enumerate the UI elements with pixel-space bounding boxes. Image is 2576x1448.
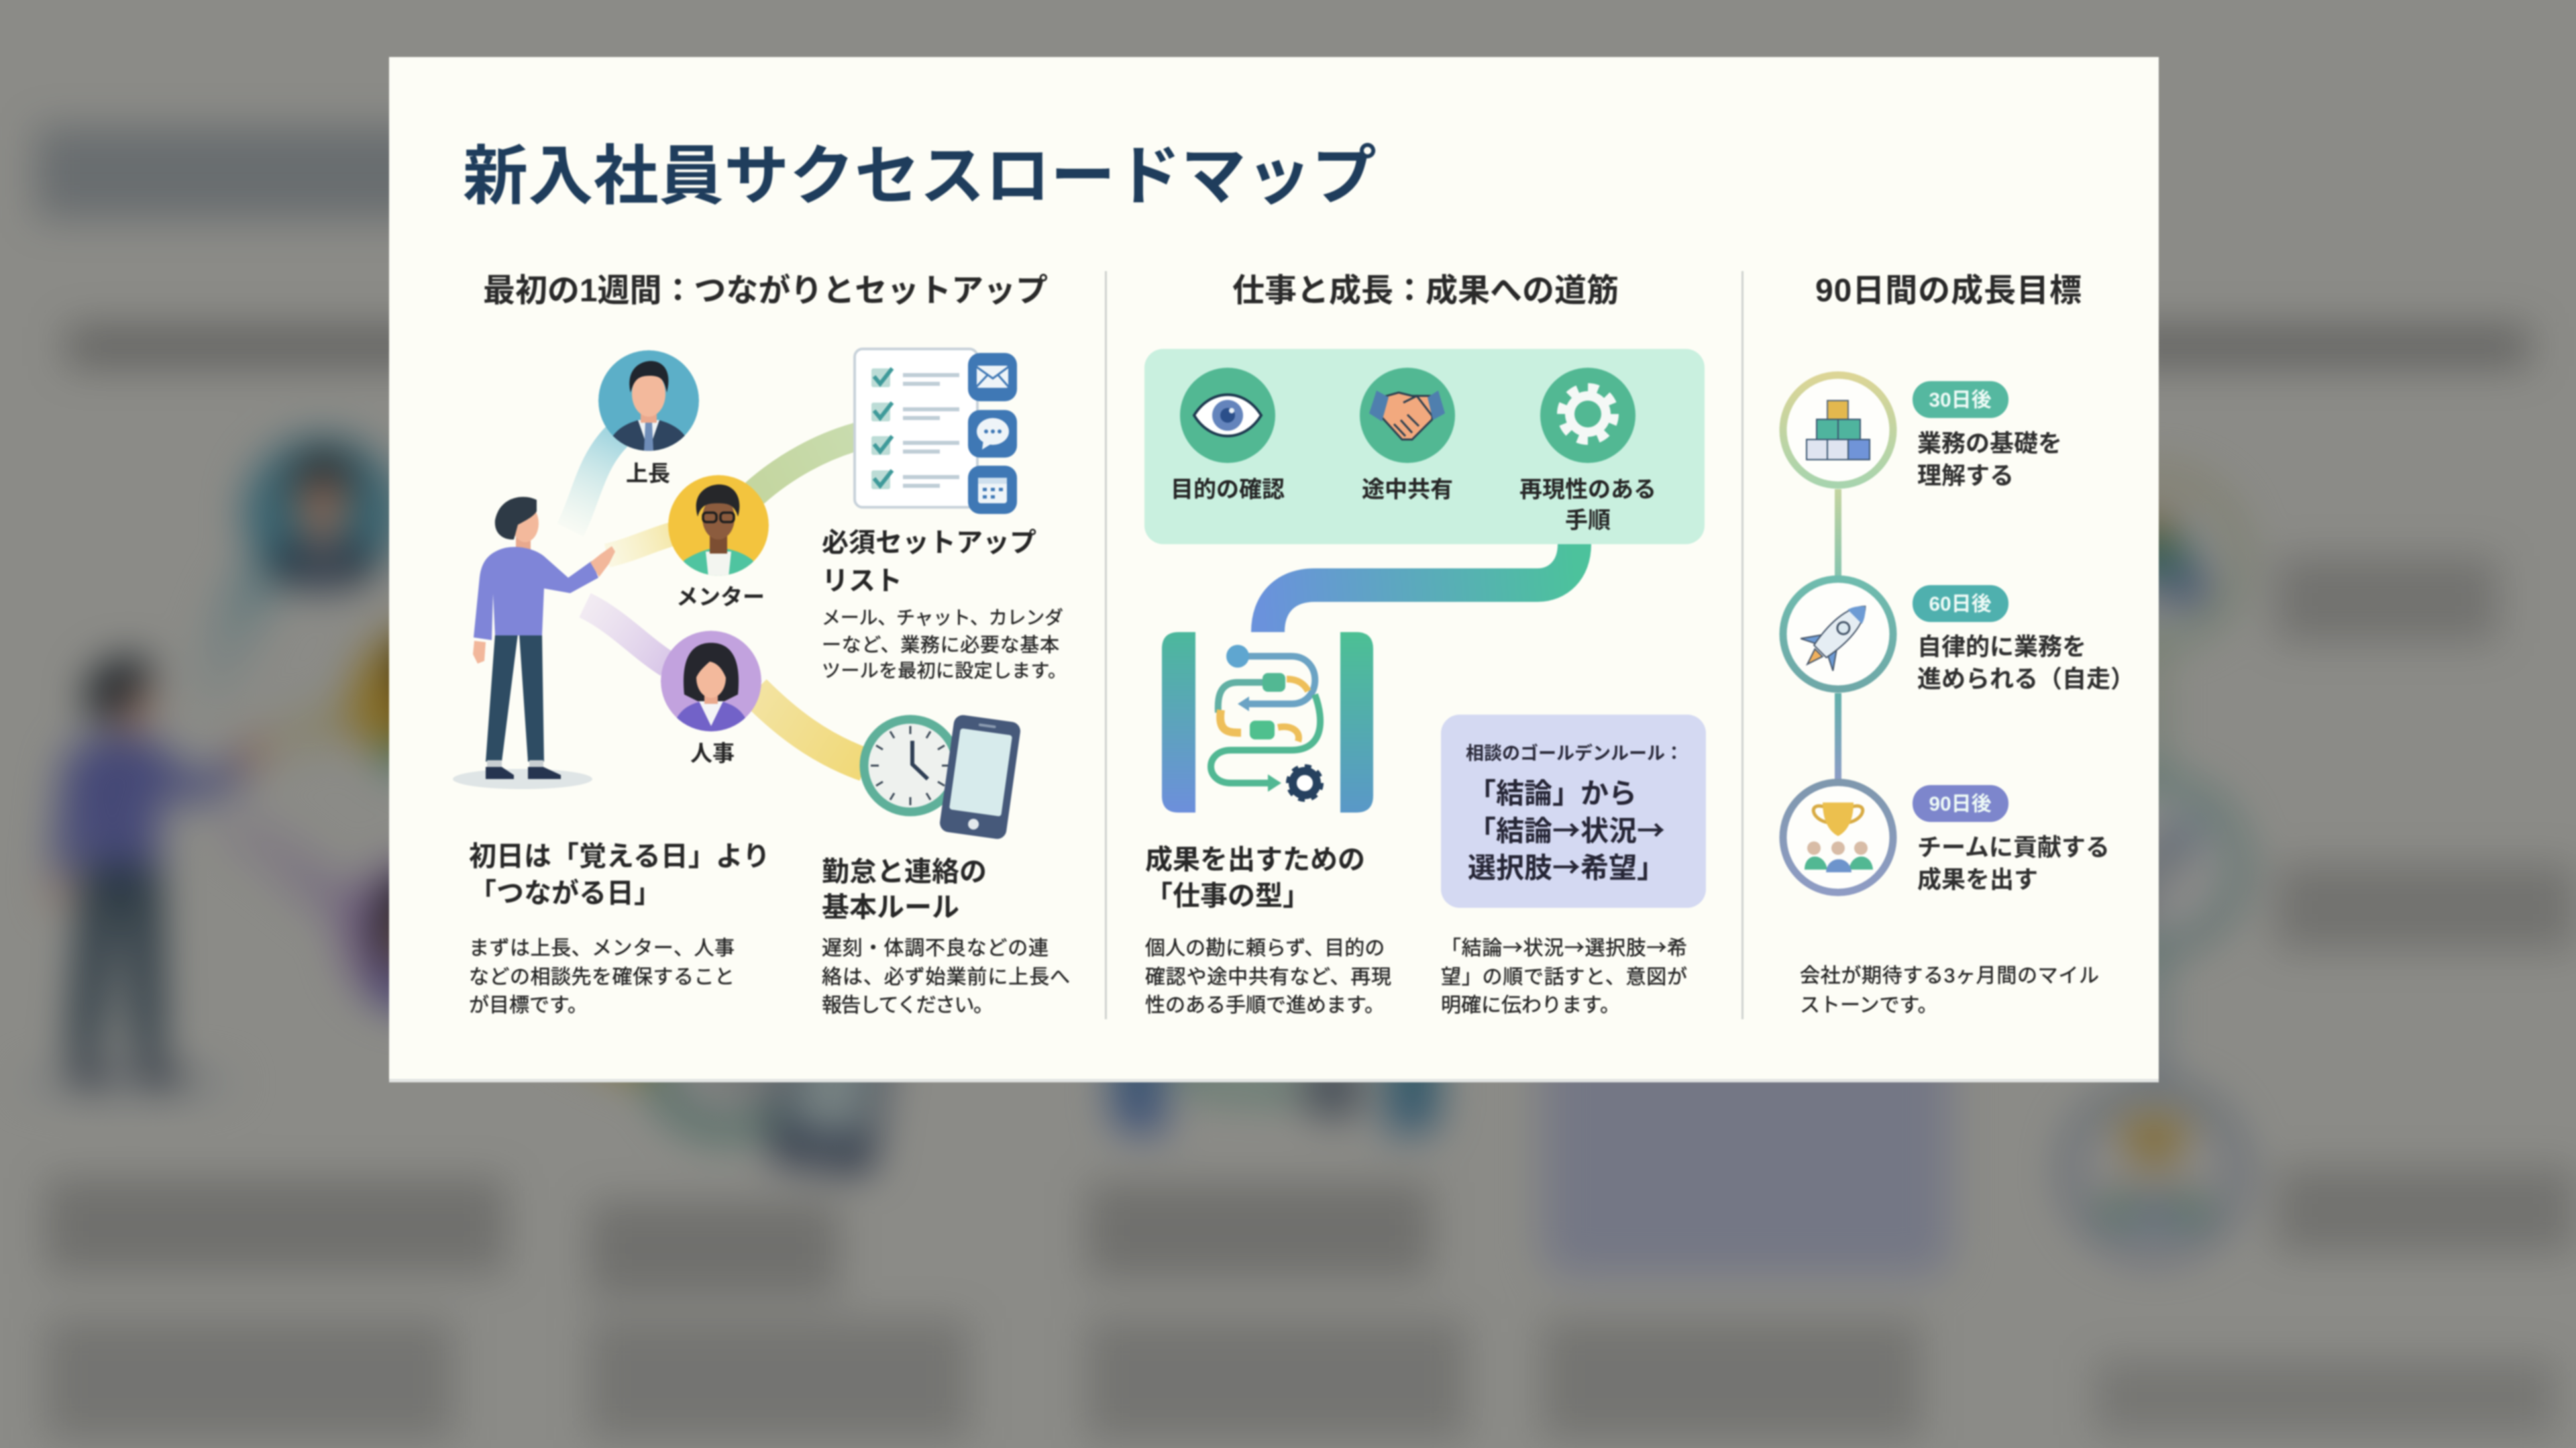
milestone: 30 days: 理解する: [1917, 462, 2014, 489]
icon: mail: [968, 353, 1017, 401]
text block: first day: [469, 841, 770, 1017]
labels: process steps: 再現性のある: [1519, 477, 1656, 503]
text block: attendance rules: 基本ルール: [822, 892, 959, 923]
avatar: manager: [598, 350, 699, 456]
milestone: 60 days: 60日後: [1929, 593, 1992, 615]
milestone: 90 days: 成果を出す: [1917, 866, 2038, 893]
text block: attendance rules: 報告してください。: [822, 994, 994, 1017]
callout: golden rule: [1466, 743, 1683, 886]
text block: work pattern: [1145, 844, 1391, 1017]
labels: process steps: 途中共有: [1362, 477, 1453, 503]
label: mentor: メンター: [676, 584, 765, 609]
text block: work pattern: 性のある手順で進めます。: [1145, 994, 1385, 1017]
illustration artwork: [453, 349, 1893, 908]
milestone: 30 days: 業務の基礎を: [1917, 429, 2062, 457]
text block: work pattern: 成果を出すための: [1145, 844, 1365, 875]
labels: process steps: [1171, 477, 1656, 533]
text block: golden rule description: [1441, 931, 1687, 1017]
text block: golden rule description: 望」の順で話すと、意図が: [1441, 966, 1687, 988]
text block: golden rule description: 「結論→状況→選択肢→希: [1441, 931, 1687, 961]
labels: process steps: 手順: [1565, 508, 1611, 533]
milestone: 90 days: [1913, 785, 2110, 893]
milestone: 60 days: 自律的に業務を: [1917, 633, 2086, 660]
label: human resources: 人事: [690, 741, 735, 766]
connection ribbons: [570, 436, 865, 765]
milestone: 90 days: 90日後: [1929, 793, 1992, 815]
text block: attendance rules: [822, 856, 1070, 1017]
text block: setup list: リスト: [822, 566, 902, 596]
text block: milestones note: [1800, 965, 2099, 1017]
text block: setup list: [822, 528, 1067, 681]
text block: first day: 初日は「覚える日」より: [469, 841, 770, 872]
text block: setup list: ーなど、業務に必要な基本: [822, 634, 1059, 656]
icon: clock and phone: [864, 714, 1022, 840]
text block: first day: が目標です。: [469, 994, 588, 1017]
milestone ring: 30 days: [1783, 375, 1893, 485]
icon: handshake: [1360, 368, 1455, 463]
icon: chat: [968, 410, 1017, 458]
callout: golden rule: 相談のゴールデンルール：: [1466, 743, 1683, 764]
text block: work pattern: 個人の勘に頼らず、目的の: [1145, 937, 1385, 960]
text block: first day: 「つながる日」: [469, 878, 661, 909]
text block: setup list: ツールを最初に設定します。: [822, 660, 1067, 681]
callout: golden rule: 選択肢→希望」: [1468, 845, 1665, 886]
callout: golden rule: 「結論→状況→: [1468, 809, 1665, 849]
icon: gear: [1540, 368, 1635, 463]
text block: attendance rules: 勤怠と連絡の: [822, 856, 987, 887]
milestone: 30 days: 30日後: [1929, 389, 1992, 411]
heading: first week: 最初の1週間：つながりとセットアップ: [483, 273, 1048, 309]
text block: golden rule description: 明確に伝わります。: [1441, 994, 1620, 1017]
panel: work process: [1144, 349, 1705, 544]
text block: work pattern: 確認や途中共有など、再現: [1145, 966, 1391, 988]
heading: work and growth: 仕事と成長：成果への道筋: [1232, 273, 1619, 309]
milestone ring: 60 days: [1783, 579, 1893, 689]
milestone: 60 days: [1913, 585, 2135, 692]
text block: attendance rules: 遅刻・体調不良などの連: [822, 937, 1049, 960]
text block: first day: などの相談先を確保すること: [469, 966, 735, 988]
milestone: 90 days: チームに貢献する: [1917, 833, 2110, 861]
timeline connectors: [1835, 489, 1841, 780]
title: 新入社員サクセスロードマップ: [463, 140, 1377, 213]
icon: setup checklist: [855, 349, 1017, 514]
icon: calendar: [968, 466, 1017, 514]
label: manager: 上長: [626, 461, 670, 486]
text block: setup list: 必須セットアップ: [822, 528, 1036, 558]
milestone ring: 90 days: [1783, 782, 1893, 892]
text block: first day: まずは上長、メンター、人事: [469, 937, 735, 960]
avatar: human resources: [661, 631, 761, 735]
milestone: 60 days: 進められる（自走）: [1917, 665, 2135, 692]
avatar: mentor: [668, 475, 769, 577]
text block: milestones note: ストーンです。: [1800, 994, 1937, 1017]
arrow: connector to process diagram: [1268, 544, 1574, 632]
heading: 90 day goals: 90日間の成長目標: [1815, 273, 2082, 309]
infographic card: [388, 56, 2160, 1083]
panel: golden rule background: [1441, 715, 1706, 908]
text block: attendance rules: 絡は、必ず始業前に上長へ: [822, 966, 1070, 988]
milestone: 30 days: [1913, 381, 2062, 489]
text block: milestones note: 会社が期待する3ヶ月間のマイル: [1800, 965, 2099, 987]
text block: work pattern: 「仕事の型」: [1145, 880, 1310, 911]
figure: new employee: [453, 497, 615, 789]
text block: setup list: メール、チャット、カレンダ: [822, 607, 1063, 628]
labels: process steps: 目的の確認: [1171, 477, 1285, 503]
icon: work pattern flow: [1162, 632, 1373, 813]
callout: golden rule: 「結論」から: [1468, 771, 1637, 812]
icon: eye: [1180, 368, 1275, 463]
